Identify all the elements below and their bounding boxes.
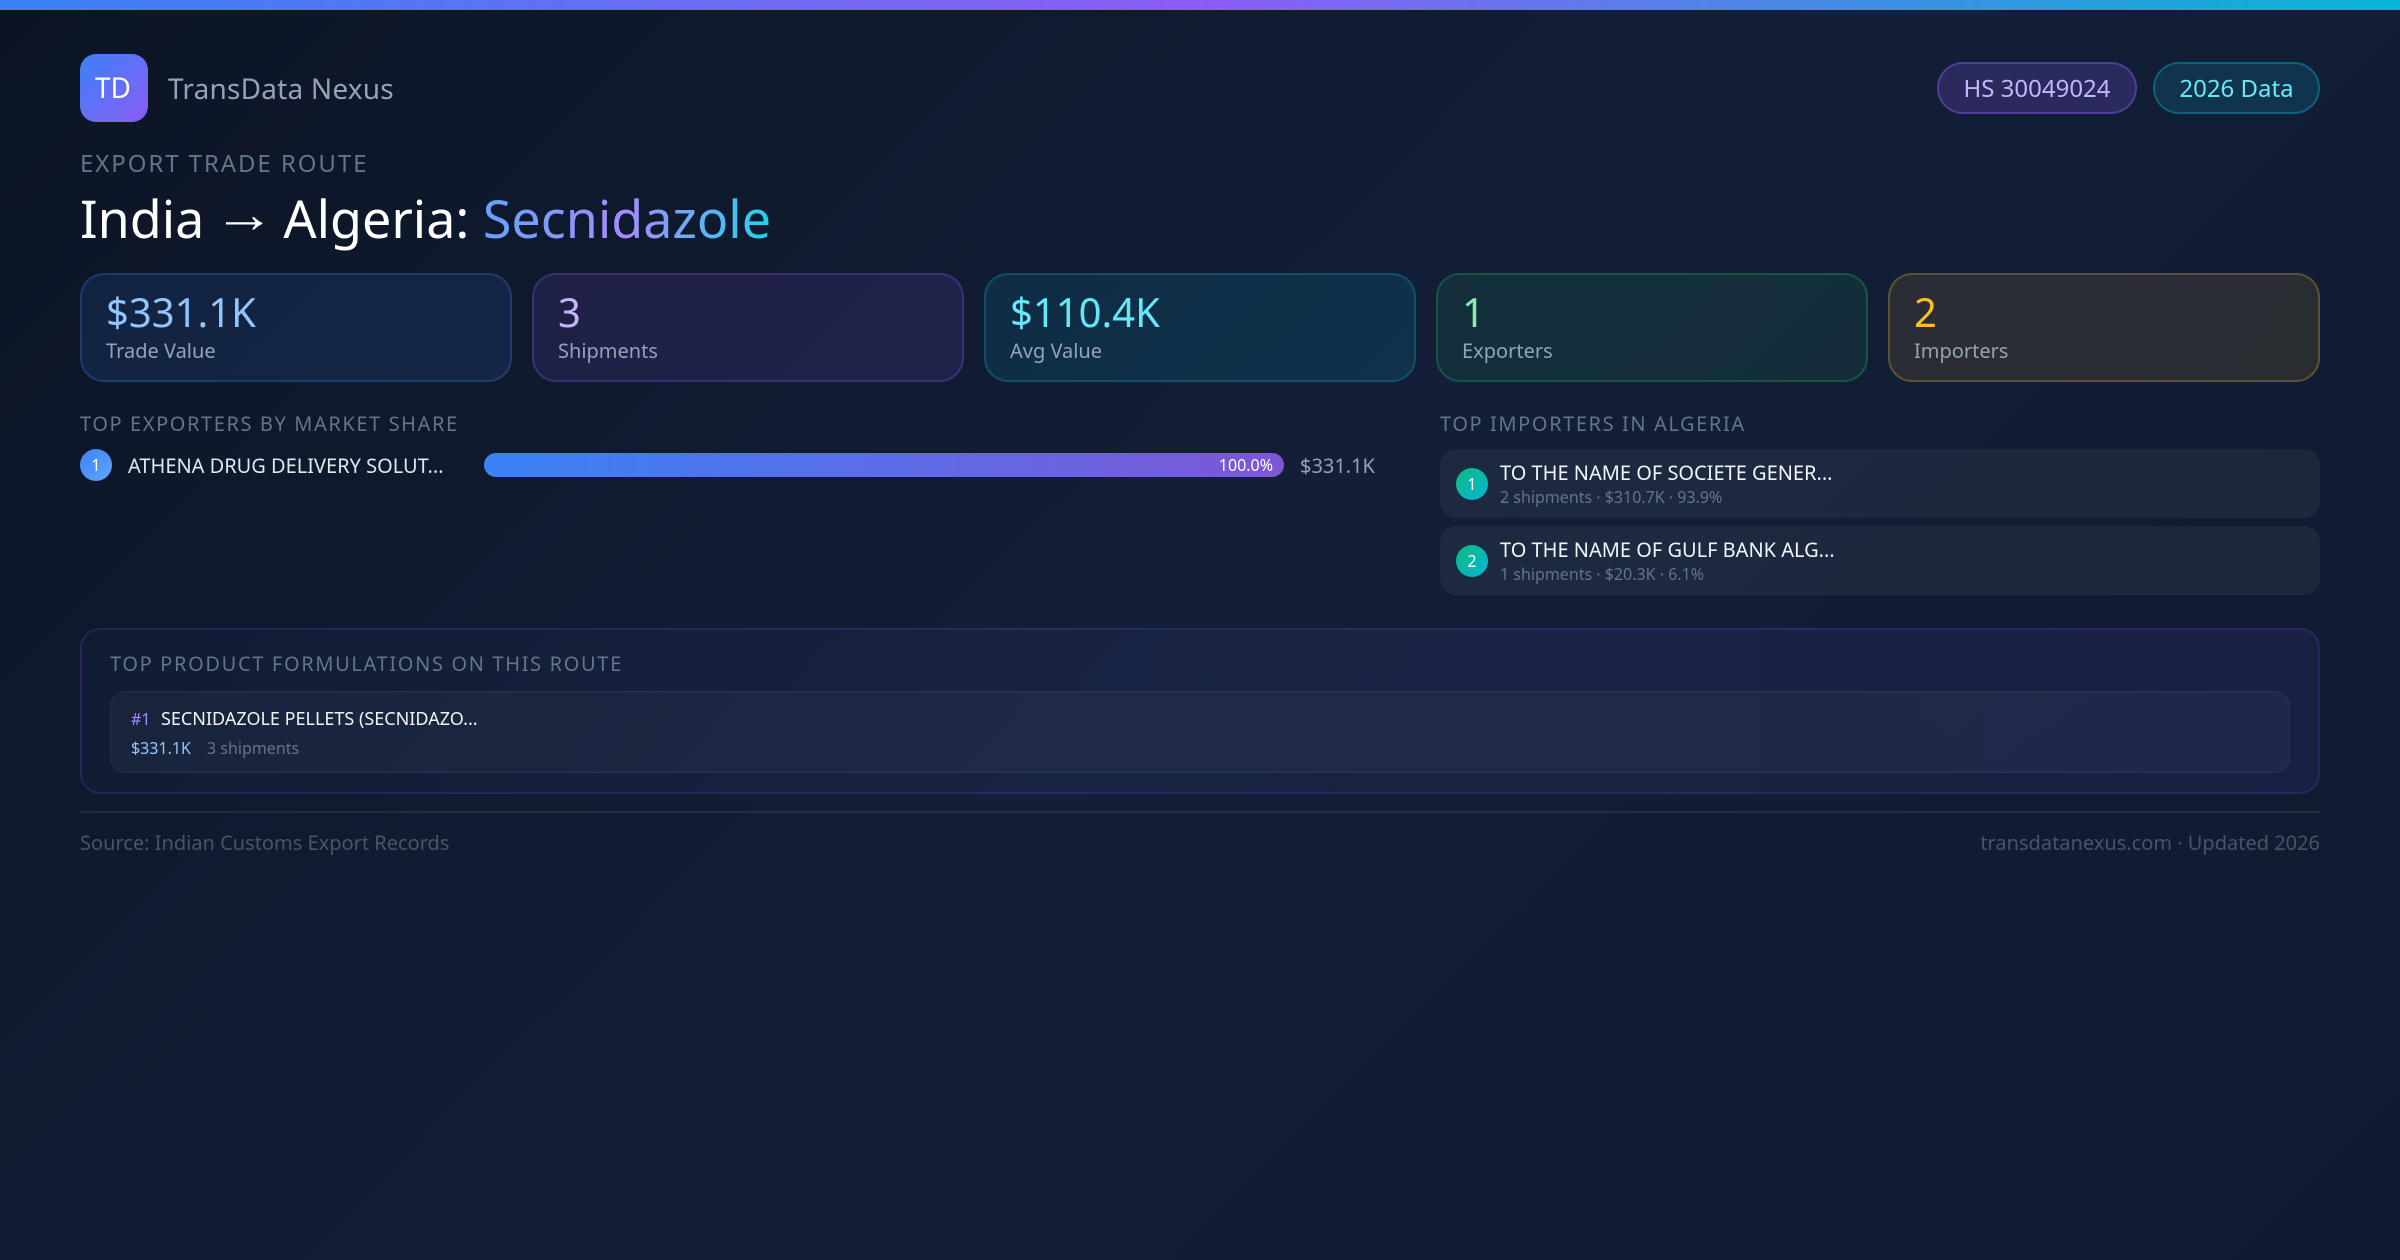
stat card: importers: Importers bbox=[1914, 337, 2008, 364]
top gradient bar bbox=[0, 0, 2400, 10]
title: → bbox=[213, 186, 275, 244]
badge: HS code: HS 30049024 bbox=[1963, 72, 2111, 105]
formulation value: $331.1K bbox=[131, 737, 191, 759]
importer 1 details: 2 shipments · $310.7K · 93.9% bbox=[1500, 486, 1722, 508]
stat card: trade value: Trade Value bbox=[106, 337, 216, 364]
exporter value: $331.1K bbox=[1300, 452, 1375, 479]
exporter rank badge bbox=[80, 449, 112, 481]
eyebrow label: EXPORT TRADE ROUTE bbox=[80, 147, 368, 180]
stat card: trade value: $331.1K bbox=[106, 284, 256, 339]
exporter share bar: 100.0% bbox=[1219, 454, 1273, 476]
badge: data year: 2026 Data bbox=[2179, 72, 2294, 105]
stat card: shipments bbox=[532, 273, 964, 382]
importer 2 rank badge: 2 bbox=[1467, 550, 1477, 572]
importer 2 details: 1 shipments · $20.3K · 6.1% bbox=[1500, 563, 1704, 585]
stat card: trade value bbox=[80, 273, 512, 382]
stat card: average value bbox=[984, 273, 1416, 382]
logo icon: TD bbox=[95, 69, 131, 107]
heading: top exporters: TOP EXPORTERS BY MARKET SHARE bbox=[80, 410, 459, 437]
exporter rank badge: 1 bbox=[91, 454, 101, 476]
exporter row bbox=[80, 449, 1375, 481]
stat card: importers bbox=[1888, 273, 2320, 382]
badge: HS code bbox=[1937, 62, 2137, 114]
stat card: exporters: 1 bbox=[1462, 284, 1485, 339]
badge: data year bbox=[2153, 62, 2320, 114]
panel: product formulations bbox=[80, 628, 2320, 794]
exporter share bar bbox=[484, 453, 1284, 477]
importer item 1 bbox=[1440, 449, 2320, 518]
stat card: shipments: 3 bbox=[558, 284, 581, 339]
footer site: transdatanexus.com · Updated 2026 bbox=[1980, 829, 2320, 856]
formulation name: SECNIDAZOLE PELLETS (SECNIDAZO... bbox=[161, 707, 478, 731]
stat card: exporters bbox=[1436, 273, 1868, 382]
heading: top importers: TOP IMPORTERS IN ALGERIA bbox=[1440, 410, 1746, 437]
importer 1 rank badge: 1 bbox=[1467, 473, 1477, 495]
footer source: Source: Indian Customs Export Records bbox=[80, 829, 449, 856]
title: India Algeria: Secnidazole bbox=[80, 183, 771, 254]
importer 2 name: TO THE NAME OF GULF BANK ALG... bbox=[1500, 536, 1835, 563]
stat card: importers: 2 bbox=[1914, 284, 1937, 339]
formulation item bbox=[110, 691, 2290, 773]
importer 1 name: TO THE NAME OF SOCIETE GENER... bbox=[1500, 459, 1833, 486]
heading: formulations: TOP PRODUCT FORMULATIONS ON THIS ROUTE bbox=[110, 650, 623, 677]
importer item 2 bbox=[1440, 526, 2320, 595]
stat card: exporters: Exporters bbox=[1462, 337, 1553, 364]
importer 1 rank badge bbox=[1456, 468, 1488, 500]
importer 2 rank badge bbox=[1456, 545, 1488, 577]
exporter name: ATHENA DRUG DELIVERY SOLUT... bbox=[128, 452, 444, 479]
stat card: average value: Avg Value bbox=[1010, 337, 1102, 364]
brand name: TransData Nexus bbox=[168, 70, 394, 108]
logo icon bbox=[80, 54, 148, 122]
formulation shipments: 3 shipments bbox=[207, 737, 299, 759]
stat card: average value: $110.4K bbox=[1010, 284, 1160, 339]
formulation rank: #1 bbox=[131, 708, 150, 730]
stat card: shipments: Shipments bbox=[558, 337, 658, 364]
